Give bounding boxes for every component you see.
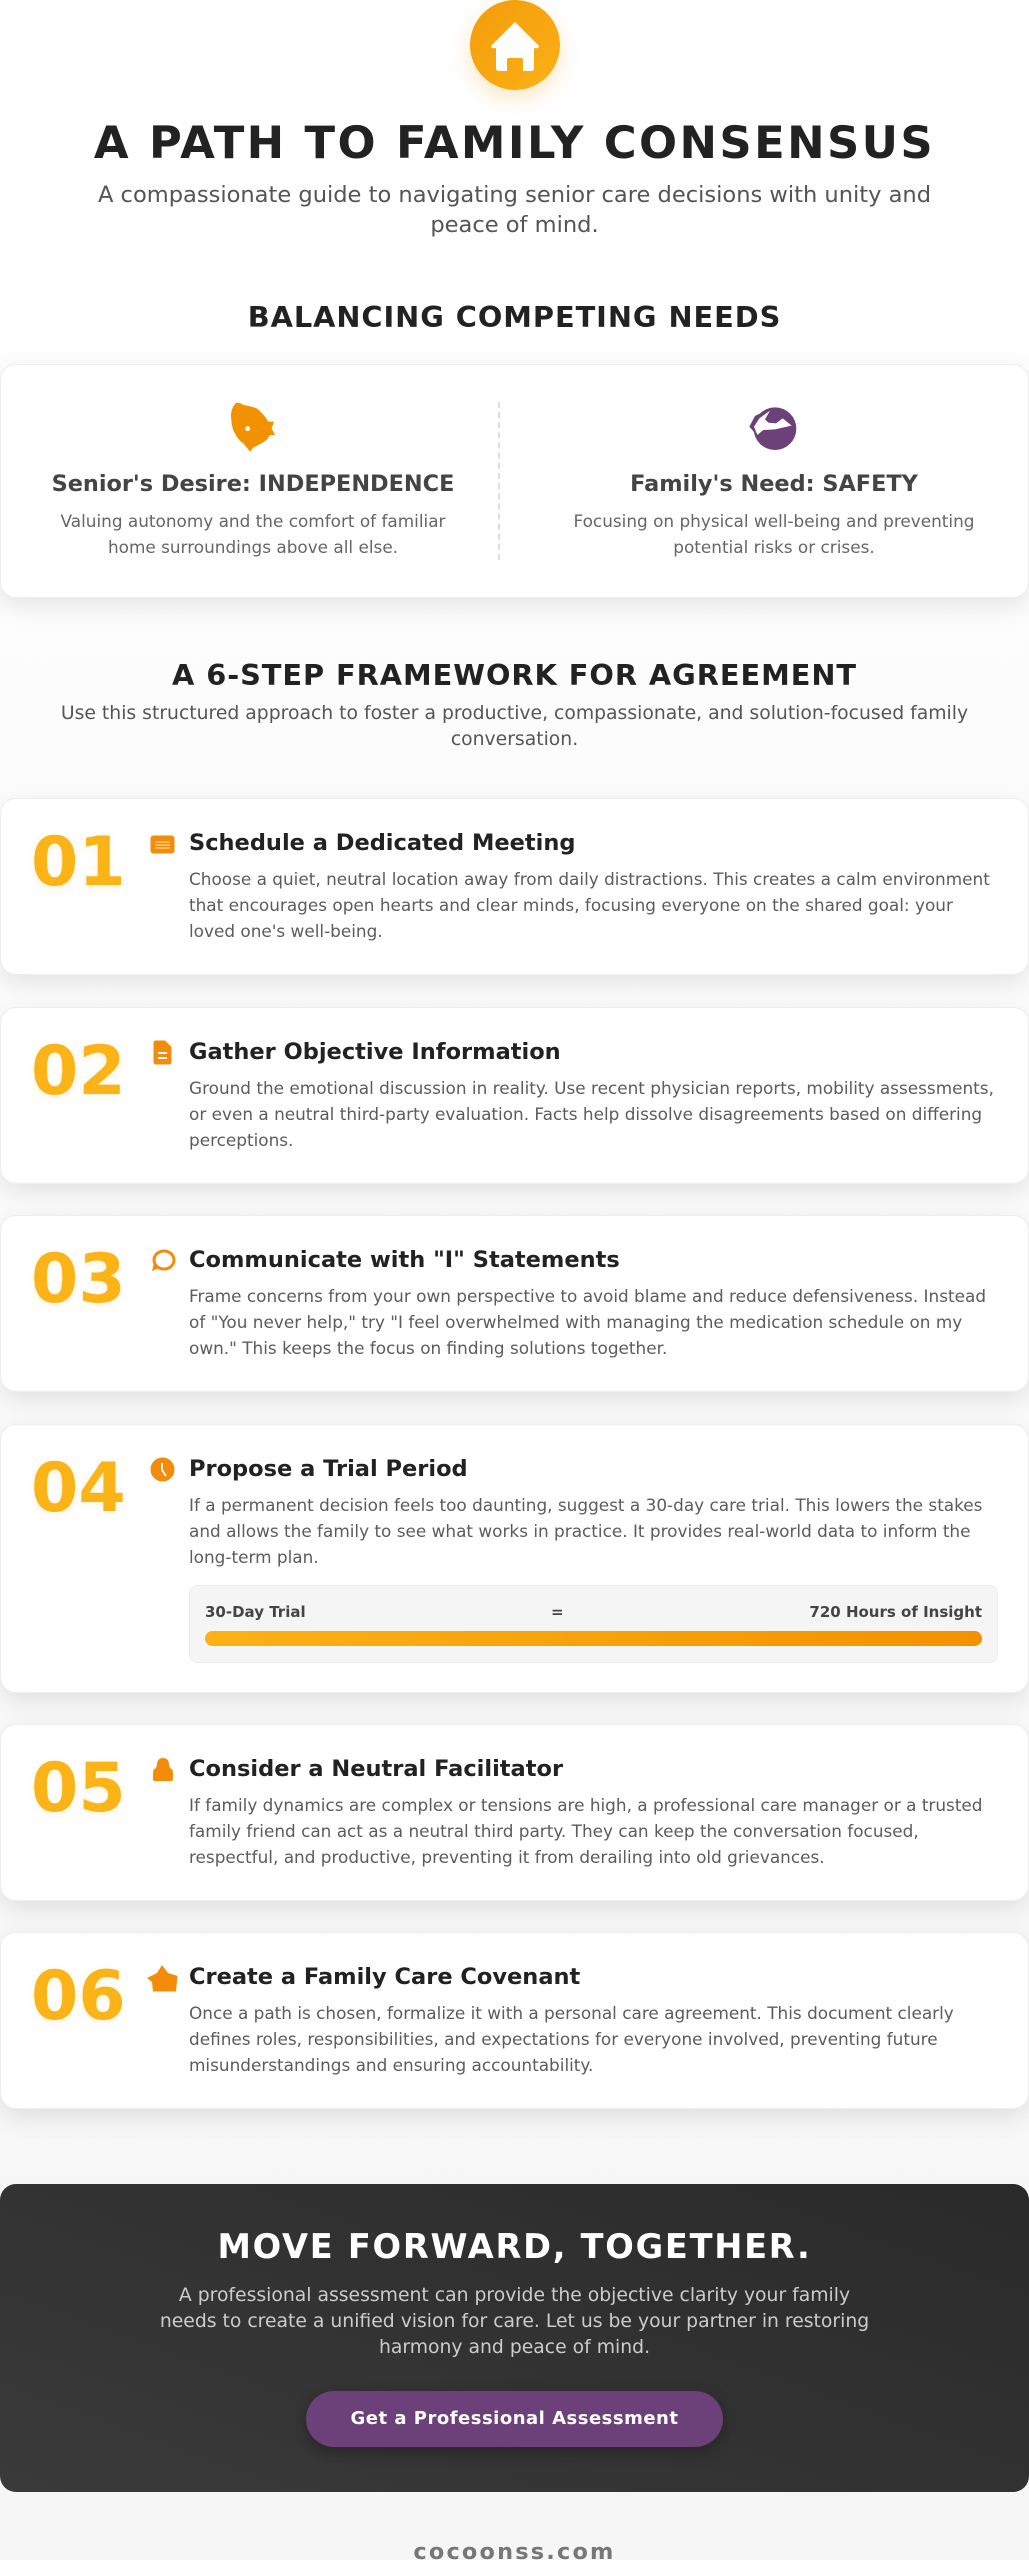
step text: If family dynamics are complex or tensions are high, a professional care manager or a trusted [189,1795,983,1815]
icon: facilitator [153,1758,173,1781]
title: A PATH TO FAMILY CONSENSUS [94,116,935,169]
step text: Ground the emotional discussion in reality. Use recent physician reports, mobility assessments, [189,1078,994,1098]
CTA button: Get a Professional Assessment [350,2408,678,2429]
independence text: Valuing autonomy and the comfort of familiar [61,511,445,531]
step text: own." This keeps the focus on finding solutions together. [189,1338,667,1358]
step text: respectful, and productive, preventing it from derailing into old grievances. [189,1847,825,1867]
panel: competing needs [0,364,1029,598]
safety text [574,511,974,557]
CTA button [306,2391,723,2447]
independence text: home surroundings above all else. [108,537,398,557]
framework intro text: conversation. [451,729,578,750]
progress bar [205,1631,982,1646]
independence heading: Senior's Desire: INDEPENDENCE [52,471,454,497]
step number: 06 [31,1957,126,2036]
panel: step 2 [0,1007,1029,1184]
panel: step 1 [0,798,1029,975]
step text: or even a neutral third-party evaluation. Facts help dissolve disagreements based on differing [189,1104,982,1124]
framework intro text [61,703,968,750]
safety heading: Family's Need: SAFETY [630,471,918,497]
step text: and allows the family to see what works in practice. It provides real-world data to inform the [189,1521,970,1541]
step text: family friend can act as a neutral third party. They can keep the conversation focused, [189,1821,919,1841]
step text [189,1795,983,1867]
step title: Gather Objective Information [189,1039,561,1065]
divider [498,402,500,560]
step text: misunderstandings and ensuring accountability. [189,2055,593,2075]
step text: that encourages open hearts and clear minds, focusing everyone on the shared goal: your [189,895,953,915]
step title: Communicate with "I" Statements [189,1247,620,1273]
footer: website: cocoonss.com [413,2539,616,2565]
subtitle [98,182,931,238]
safety text: potential risks or crises. [673,537,875,557]
heading: balancing competing needs: BALANCING COMPETING NEEDS [248,300,781,334]
framework intro text: Use this structured approach to foster a productive, compassionate, and solution-focused family [61,703,968,724]
step number: 04 [31,1449,126,1528]
CTA text: needs to create a unified vision for care. Let us be your partner in restoring [160,2311,869,2332]
panel: step 3 [0,1215,1029,1392]
CTA text [160,2285,869,2358]
step text: Choose a quiet, neutral location away from daily distractions. This creates a calm environment [189,869,990,889]
step text: Once a path is chosen, formalize it with a personal care agreement. This document clearly [189,2003,954,2023]
icon: covenant star [147,1965,178,1992]
step title: Consider a Neutral Facilitator [189,1756,563,1782]
step text: loved one's well-being. [189,921,383,941]
step text [189,869,990,941]
header icon: house badge [470,0,560,90]
CTA text: A professional assessment can provide the objective clarity your family [179,2285,850,2306]
step number: 01 [31,823,126,902]
icon: independence [231,402,275,452]
trial infographic [189,1585,998,1663]
step text [189,1495,982,1567]
step title: Schedule a Dedicated Meeting [189,830,576,856]
step text [189,1286,986,1358]
step number: 03 [31,1240,126,1319]
step text: perceptions. [189,1130,293,1150]
equals sign: = [551,1603,564,1621]
CTA heading: MOVE FORWARD, TOGETHER. [217,2227,812,2266]
icon: meeting [150,836,174,854]
CTA text: harmony and peace of mind. [379,2337,650,2358]
icon: safety [749,407,796,450]
step text: long-term plan. [189,1547,319,1567]
icon: speech bubble [152,1250,176,1271]
step text [189,2003,954,2075]
panel: step 4 [0,1424,1029,1693]
panel: call to action [0,2184,1029,2492]
trial label: 30-Day Trial [205,1603,306,1621]
step title: Propose a Trial Period [189,1456,468,1482]
safety text: Focusing on physical well-being and preventing [574,511,974,531]
step text: of "You never help," try "I feel overwhelmed with managing the medication schedule on my [189,1312,962,1332]
step number: 05 [31,1749,126,1828]
hours label: 720 Hours of Insight [809,1603,982,1621]
step text: Frame concerns from your own perspective to avoid blame and reduce defensiveness. Instead [189,1286,986,1306]
icon: document [154,1040,172,1064]
step text: defines roles, responsibilities, and expectations for everyone involved, preventing future [189,2029,938,2049]
independence text [60,511,446,557]
step title: Create a Family Care Covenant [189,1964,580,1990]
subtitle: A compassionate guide to navigating senior care decisions with unity and [98,182,931,208]
panel: step 6 [0,1932,1029,2109]
step number: 02 [31,1032,126,1111]
subtitle: peace of mind. [430,212,599,238]
icon: clock [150,1458,174,1482]
panel: step 5 [0,1724,1029,1901]
heading: 6-step framework: A 6-STEP FRAMEWORK FOR AGREEMENT [172,658,857,692]
step text: If a permanent decision feels too daunting, suggest a 30-day care trial. This lowers the stakes [189,1495,982,1515]
step text [189,1078,994,1150]
